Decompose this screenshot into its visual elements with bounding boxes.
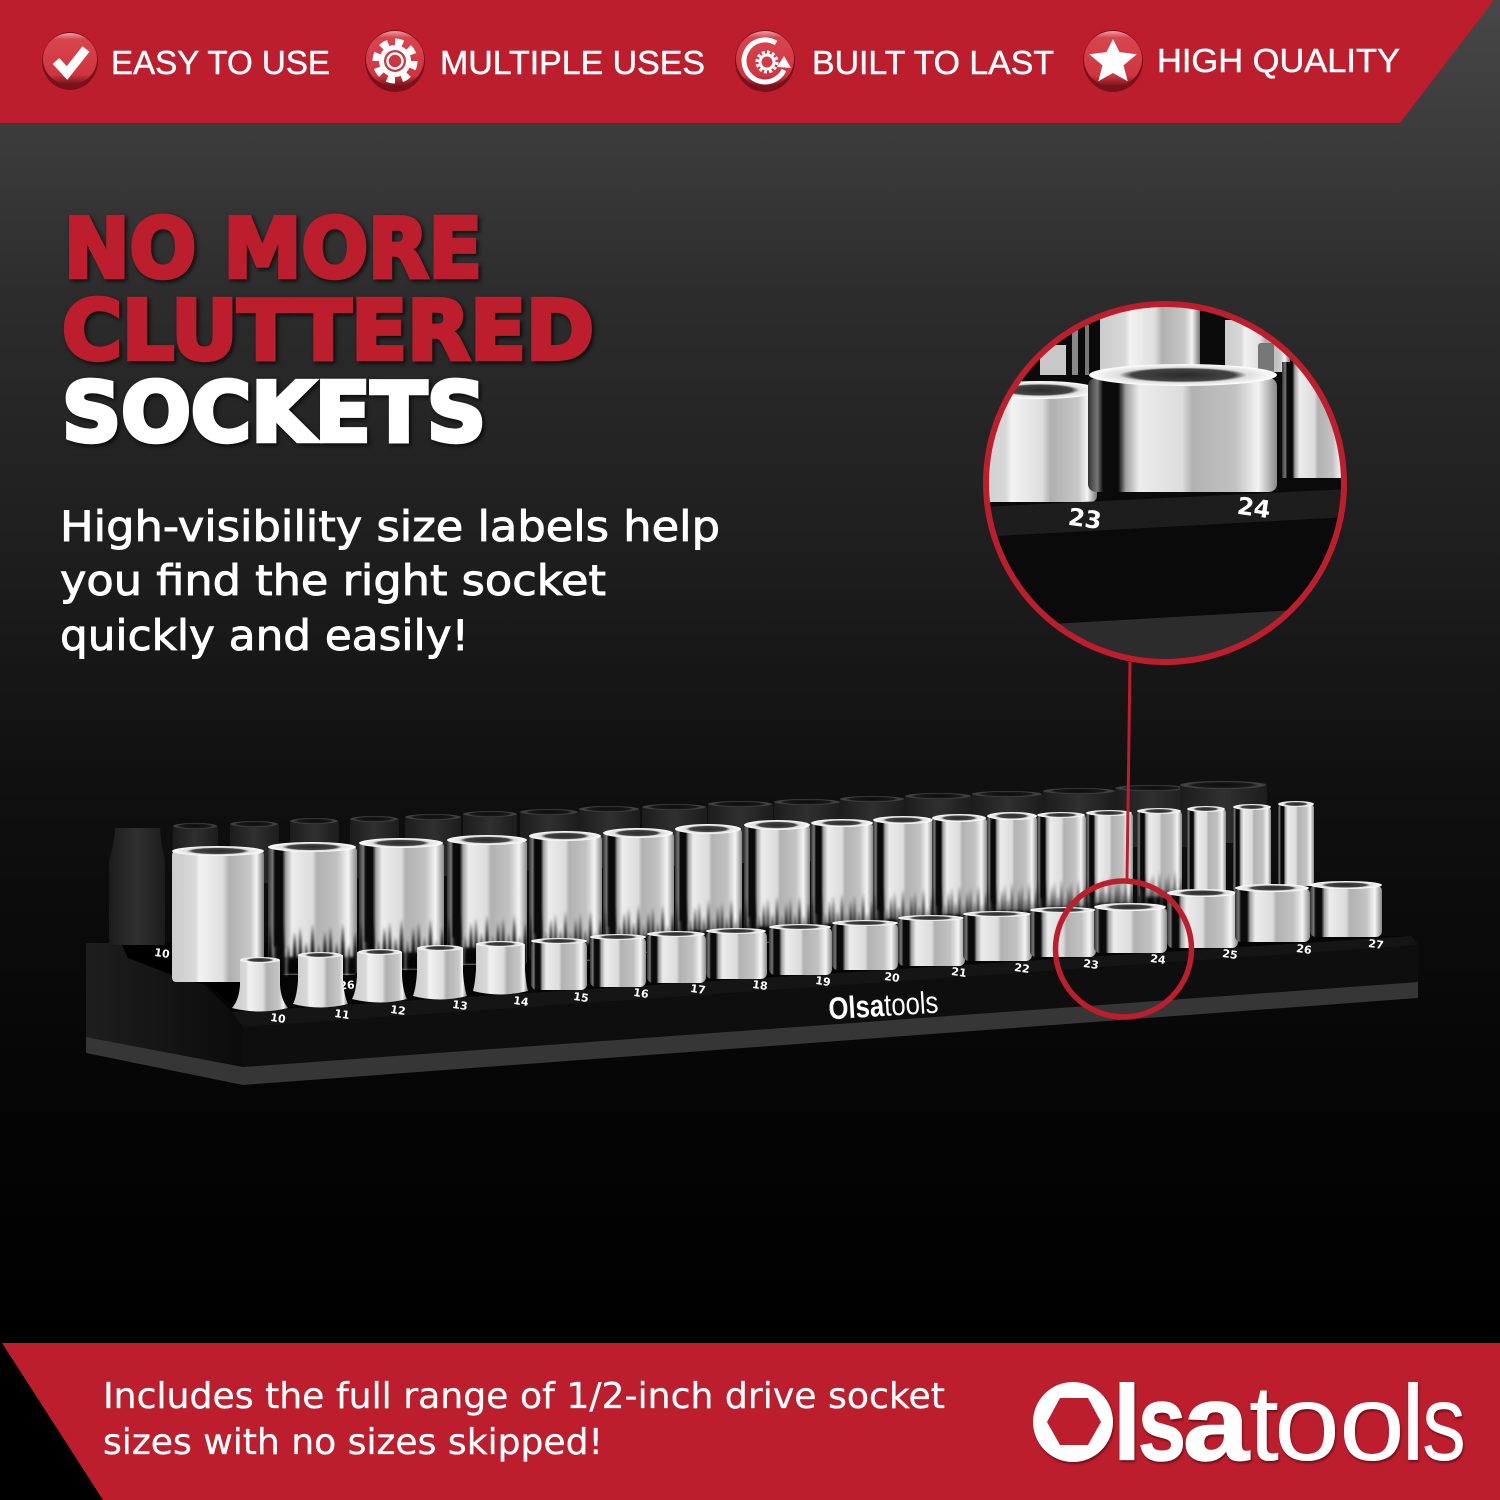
back size labels: 26 (339, 978, 355, 993)
tray size labels: 25 (1221, 947, 1238, 962)
brand logo: a (1183, 1362, 1250, 1483)
tray size labels: 18 (751, 978, 768, 993)
icon: circular arrow with gear (735, 30, 795, 92)
label: multiple uses: MULTIPLE USES (440, 44, 705, 81)
lens size label 23: 23 (1066, 503, 1103, 535)
banner text: sizes with no sizes skipped! (103, 1422, 603, 1463)
tray size labels: 13 (451, 998, 468, 1013)
middle row chrome sockets (172, 801, 1314, 982)
callout circle (1056, 881, 1192, 1017)
brand logo: l (1401, 1362, 1425, 1483)
callout line (1127, 662, 1130, 880)
back row black sockets (173, 781, 1267, 885)
brand logo: t (1249, 1362, 1279, 1483)
front row small flared sockets (232, 941, 528, 1012)
top banner (0, 0, 1494, 123)
brand logo: o (1339, 1362, 1405, 1483)
tray logo: Olsatools (827, 985, 939, 1026)
tray size labels: 27 (1367, 937, 1384, 952)
icon: star (1083, 30, 1143, 92)
tray size labels: 10 (269, 1011, 287, 1026)
body text: you find the right socket (60, 556, 606, 605)
headline line 2: CLUTTERED (62, 284, 594, 379)
brand logo: l (1112, 1362, 1142, 1483)
tray size labels: 24 (1149, 952, 1167, 967)
brand logo (1033, 1361, 1466, 1484)
tray size labels: 11 (333, 1007, 350, 1022)
tray base (86, 936, 1418, 1085)
bottom banner (2, 1343, 1500, 1500)
brand logo: s (1422, 1362, 1466, 1483)
body text (60, 502, 720, 660)
label: high quality: HIGH QUALITY (1157, 42, 1400, 79)
headline line 1: NO MORE (64, 202, 482, 297)
tray size labels: 21 (950, 965, 967, 980)
lens ring (986, 304, 1344, 662)
magnified lens detail (975, 298, 1350, 670)
tray size labels (269, 937, 1384, 1026)
brand logo: o (1274, 1362, 1340, 1483)
icon: check mark (42, 32, 98, 90)
tray size labels: 12 (389, 1003, 406, 1018)
headline (62, 202, 594, 461)
tray size labels: 17 (689, 982, 706, 997)
banner text: Includes the full range of 1/2-inch drive socket (103, 1376, 945, 1417)
label: easy to use: EASY TO USE (111, 44, 330, 81)
tray size labels: 23 (1082, 957, 1099, 972)
headline line 3: SOCKETS (62, 366, 486, 461)
back size labels (153, 946, 355, 993)
brand logo: O (1033, 1361, 1113, 1484)
icon: gear (365, 30, 425, 92)
body text: High-visibility size labels help (60, 502, 720, 551)
label: built to last: BUILT TO LAST (812, 44, 1054, 81)
tray size labels: 16 (632, 986, 650, 1001)
brand logo: s (1138, 1362, 1186, 1483)
tray size labels: 22 (1013, 961, 1030, 976)
lens contents (989, 307, 1341, 659)
socket organizer product (86, 781, 1418, 1085)
lens size label 24: 24 (1235, 492, 1272, 524)
body text: quickly and easily! (60, 611, 469, 660)
tray size labels: 19 (814, 974, 831, 989)
tray size labels: 15 (572, 990, 589, 1005)
tray size labels: 20 (883, 970, 901, 985)
standalone black socket (109, 828, 165, 945)
tray size labels: 26 (1295, 942, 1313, 957)
back size labels: 10 (153, 946, 171, 961)
banner text (103, 1376, 945, 1463)
tray size labels: 14 (512, 994, 530, 1009)
front row chrome sockets (531, 881, 1382, 990)
